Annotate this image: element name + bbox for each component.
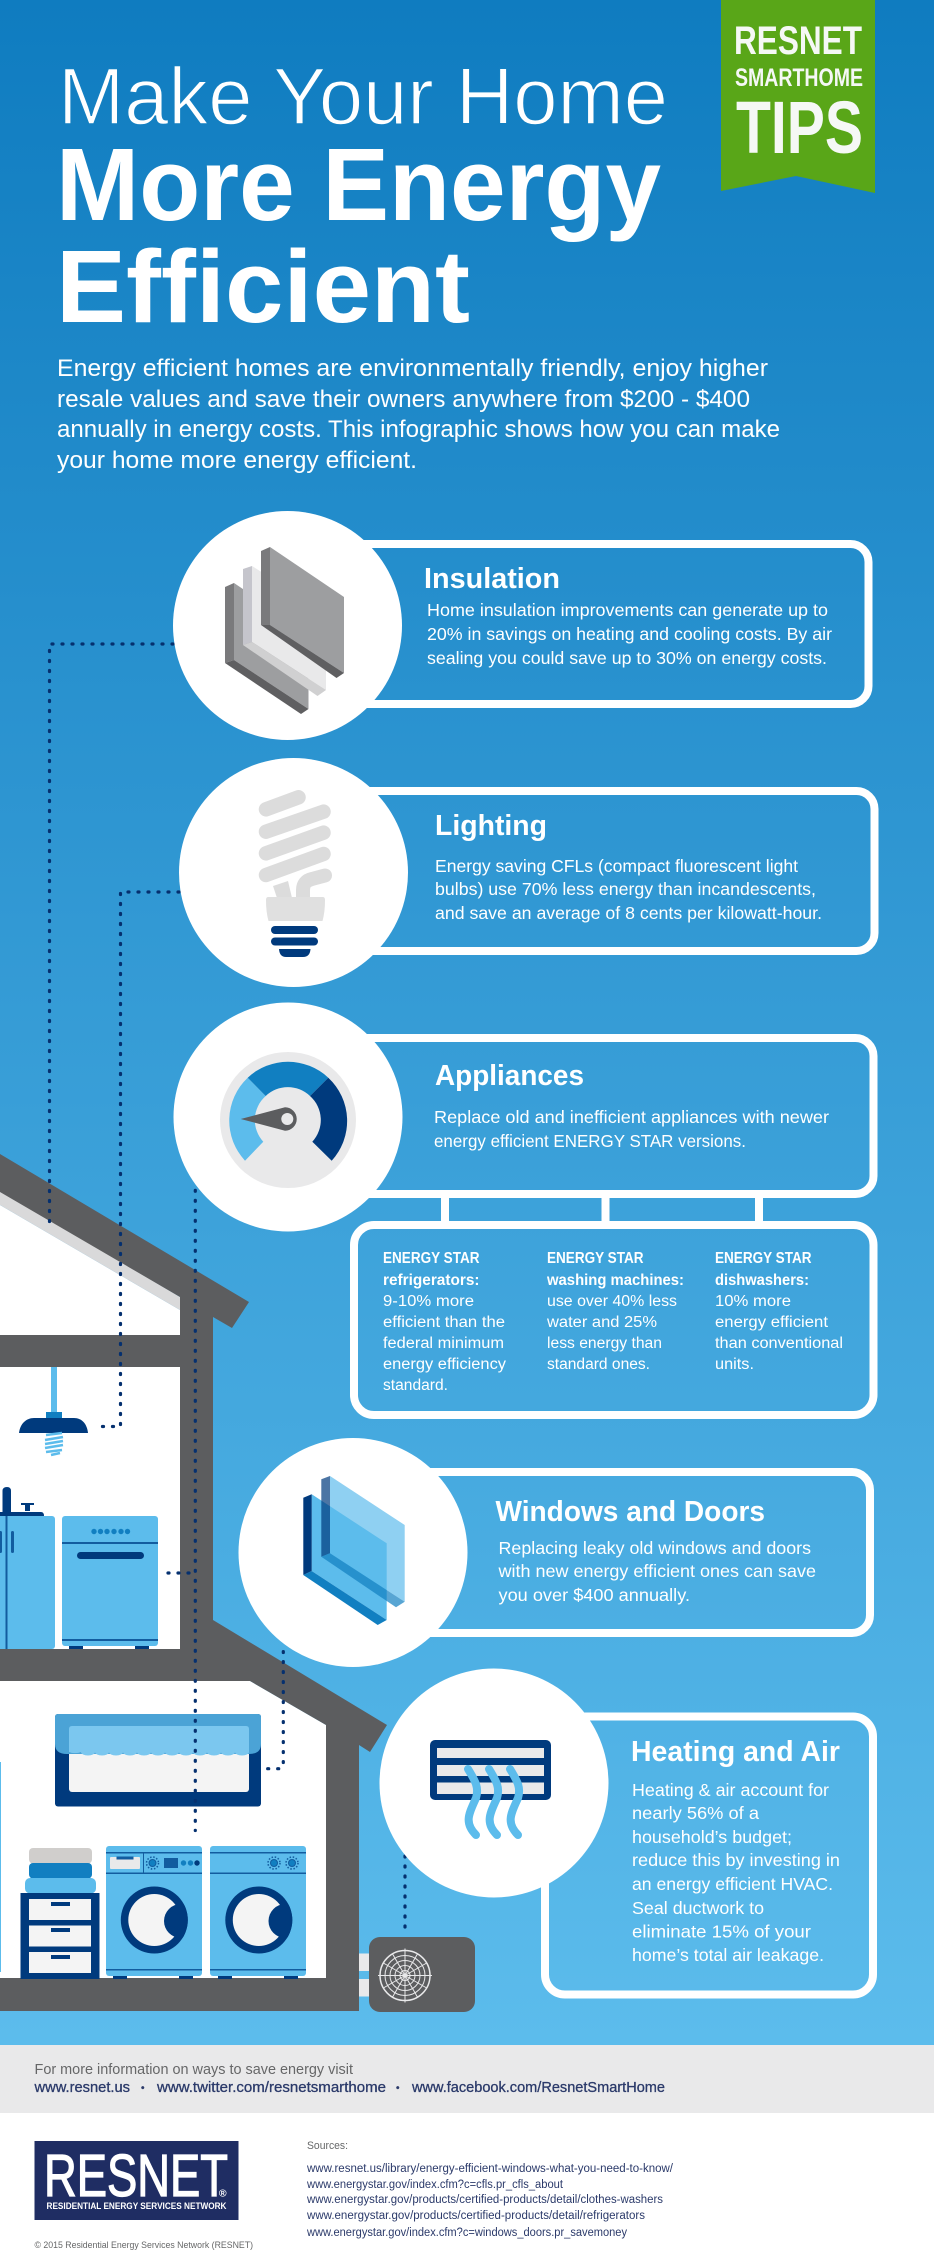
body text: an energy efficient HVAC. <box>632 1874 833 1894</box>
refrigerators text: federal minimum <box>383 1335 504 1352</box>
washing machines text: standard ones. <box>547 1356 650 1373</box>
body text: Replace old and inefficient appliances with newer <box>434 1107 829 1127</box>
footer band: more information: For more information on ways to save energy visit <box>34 2062 353 2078</box>
icon: CFL bulb <box>266 797 325 957</box>
dotted line: appliances to dishwasher <box>168 1571 190 1575</box>
dishwashers text <box>715 1250 843 1373</box>
body text: home’s total air leakage. <box>632 1945 824 1965</box>
lower roof, wall and floor <box>0 1620 387 2011</box>
icon circle <box>179 758 408 987</box>
icon circle <box>380 1668 608 1898</box>
logo: RESNET: RESIDENTIAL ENERGY SERVICES NETWORK <box>46 2201 227 2212</box>
icon circle <box>174 1002 402 1232</box>
footer band: more information: www.twitter.com/resnetsmarthome <box>156 2080 386 2096</box>
panel: appliances <box>174 1002 874 1415</box>
body text: eliminate 15% of your <box>632 1922 811 1942</box>
clothes dryer <box>210 1846 306 1979</box>
body text: reduce this by investing in <box>632 1850 840 1870</box>
illustration: house cross-section <box>0 1154 475 2012</box>
dishwashers text: ENERGY STAR <box>715 1250 812 1267</box>
body text: 20% in savings on heating and cooling costs. By air <box>427 624 832 644</box>
connectors to sub-panel <box>441 1196 763 1223</box>
footer band: more information: • <box>396 2083 400 2094</box>
icon: insulation layers <box>225 547 344 714</box>
sources list: www.energystar.gov/products/certified-products/detail/clothes-washers <box>306 2194 663 2206</box>
body text: energy efficient ENERGY STAR versions. <box>434 1131 746 1151</box>
dishwashers text: energy efficient <box>715 1314 829 1331</box>
body text <box>427 600 832 668</box>
refrigerators text: ENERGY STAR <box>383 1250 480 1267</box>
kitchen sink and cabinets <box>0 1487 55 1649</box>
body text: nearly 56% of a <box>632 1803 759 1823</box>
dishwashers text: units. <box>715 1356 754 1373</box>
intro paragraph: Energy efficient homes are environmentally friendly, enjoy higher <box>57 355 768 382</box>
intro paragraph: your home more energy efficient. <box>57 447 417 474</box>
logo: RESNET: RESNET <box>44 2143 228 2209</box>
icon: air conditioner <box>430 1740 551 1835</box>
logo: RESNET: ® <box>219 2188 227 2200</box>
dishwashers text: than conventional <box>715 1335 843 1352</box>
ribbon: RESNET SmartHome Tips: RESNET <box>734 19 862 63</box>
window with valance <box>55 1714 261 1806</box>
dishwashers text: 10% more <box>715 1293 791 1310</box>
outdoor AC unit <box>359 1937 475 2012</box>
dotted line: heating to outdoor unit <box>403 1856 407 1932</box>
sources list: www.energystar.gov/index.cfm?c=cfls.pr_cfls_about <box>306 2179 564 2191</box>
panel: insulation <box>173 511 868 740</box>
title: Efficient <box>56 229 470 344</box>
copyright: © 2015 Residential Energy Services Network (RESNET) <box>34 2240 253 2251</box>
body text: Replacing leaky old windows and doors <box>498 1538 811 1558</box>
body text: sealing you could save up to 30% on energy costs. <box>427 648 827 668</box>
body text: Heating & air account for <box>632 1780 829 1800</box>
icon circle <box>238 1438 468 1667</box>
icon: window panes <box>303 1476 405 1625</box>
refrigerators text <box>383 1250 506 1394</box>
panel outline <box>300 791 874 951</box>
ribbon: RESNET SmartHome Tips <box>721 0 875 193</box>
panel outline <box>380 1472 870 1633</box>
dishwasher <box>62 1516 158 1649</box>
washing machines text <box>546 1250 684 1373</box>
dotted line: appliances to washer <box>194 1190 197 1830</box>
footer band: more information: www.resnet.us <box>33 2080 130 2096</box>
body text: you over $400 annually. <box>498 1585 690 1605</box>
heading: Heating and Air <box>631 1736 840 1768</box>
roof underside shadow <box>0 1190 180 1310</box>
footer band: more information: • <box>141 2083 145 2094</box>
dotted line: windows to window <box>268 1643 283 1769</box>
washing machines text: less energy than <box>547 1335 662 1352</box>
footer band: more information: www.facebook.com/ResnetSmartHome <box>411 2080 665 2096</box>
body text: with new energy efficient ones can save <box>497 1561 816 1581</box>
refrigerators text: energy efficiency <box>383 1356 506 1373</box>
footer band: more information <box>0 2045 934 2113</box>
panel outline <box>300 544 868 704</box>
body text <box>434 1107 829 1151</box>
body text <box>497 1538 816 1605</box>
dotted line: lighting to lamp <box>98 892 179 1426</box>
body text: household’s budget; <box>632 1827 792 1847</box>
heading: Appliances <box>435 1060 584 1092</box>
body text: Energy saving CFLs (compact fluorescent light <box>435 856 798 876</box>
middle floor <box>0 1335 180 1367</box>
body text: Home insulation improvements can generate up to <box>427 600 828 620</box>
washing machines text: use over 40% less <box>547 1293 677 1310</box>
panel: heating and air <box>380 1668 873 1994</box>
pendant light <box>19 1367 88 1455</box>
washing machine <box>106 1846 202 1979</box>
intro paragraph: resale values and save their owners anywhere from $200 - $400 <box>57 386 750 413</box>
panel: lighting <box>179 758 874 987</box>
heading: Lighting <box>435 810 547 842</box>
sources list: www.energystar.gov/index.cfm?c=windows_doors.pr_savemoney <box>306 2227 627 2239</box>
panel outline <box>300 1038 874 1194</box>
sources list <box>306 2140 674 2239</box>
logo: RESNET <box>34 2141 238 2220</box>
intro paragraph <box>57 355 780 474</box>
intro paragraph: annually in energy costs. This infographic shows how you can make <box>57 416 780 443</box>
white footer background <box>0 2113 934 2268</box>
house interior walls <box>0 1205 326 1982</box>
washing machines text: ENERGY STAR <box>547 1250 644 1267</box>
ribbon: RESNET SmartHome Tips: TIPS <box>736 86 863 169</box>
heading: Insulation <box>424 563 560 595</box>
sources list: www.energystar.gov/products/certified-products/detail/refrigerators <box>306 2210 645 2222</box>
washing machines text: water and 25% <box>546 1314 657 1331</box>
body text: and save an average of 8 cents per kilowatt-hour. <box>435 903 822 923</box>
sub-panel outline <box>354 1225 874 1415</box>
title: Make Your Home <box>58 52 668 142</box>
panel: windows and doors <box>238 1438 870 1667</box>
refrigerators text: standard. <box>383 1377 448 1394</box>
dotted line: insulation to attic <box>50 644 173 1226</box>
ribbon: RESNET SmartHome Tips: SMARTHOME <box>735 64 863 92</box>
heading: Windows and Doors <box>496 1496 765 1528</box>
body text: bulbs) use 70% less energy than incandescents, <box>435 879 816 899</box>
refrigerators text: efficient than the <box>383 1314 505 1331</box>
icon: energy gauge <box>220 1052 356 1188</box>
body text <box>435 856 822 923</box>
dishwashers text: dishwashers: <box>715 1272 809 1289</box>
body text <box>632 1780 840 1965</box>
refrigerators text: 9-10% more <box>383 1293 474 1310</box>
icon circle <box>173 511 402 740</box>
washing machines text: washing machines: <box>546 1272 684 1289</box>
body text: Seal ductwork to <box>632 1898 764 1918</box>
refrigerators text: refrigerators: <box>383 1272 480 1289</box>
upper roof and wall <box>0 1154 249 1660</box>
laundry drawers with stacked towels <box>0 1762 100 1979</box>
sources list: Sources: <box>307 2140 348 2152</box>
sources list: www.resnet.us/library/energy-efficient-windows-what-you-need-to-know/ <box>306 2163 674 2175</box>
panel outline <box>545 1716 873 1994</box>
title: More Energy <box>56 127 661 242</box>
title <box>56 52 668 344</box>
